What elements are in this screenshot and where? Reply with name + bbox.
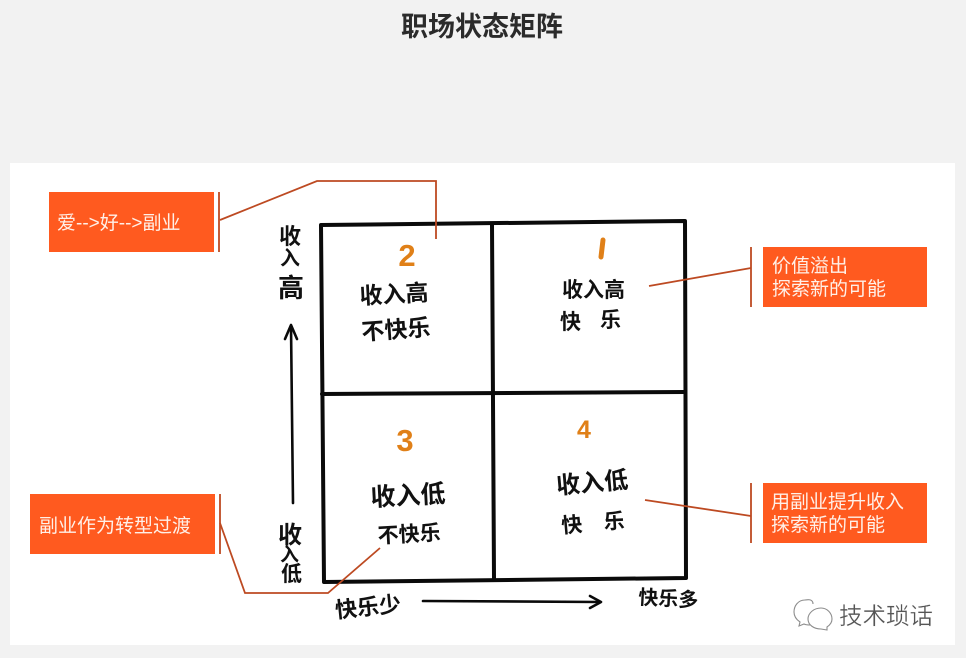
callout: side job raises income: 用副业提升收入 bbox=[771, 491, 904, 513]
watermark: account name: 技术琐话 bbox=[839, 603, 933, 629]
x axis arrow bbox=[423, 596, 601, 608]
quadrant 4: 4 bbox=[577, 416, 591, 444]
callout: value overflow bbox=[649, 247, 927, 307]
quadrant 1: 快 bbox=[560, 311, 581, 334]
quadrant 2: 不快乐 bbox=[361, 314, 431, 345]
quadrant 1: 乐 bbox=[600, 309, 621, 332]
title: 职场状态矩阵 bbox=[401, 12, 563, 42]
callout: side job raises income: 探索新的可能 bbox=[771, 514, 885, 536]
callout: love to side job bbox=[49, 181, 436, 252]
y axis: income low label: 入 bbox=[280, 544, 299, 566]
quadrant 3: 收入低 bbox=[370, 480, 446, 512]
quadrant 2 bbox=[359, 238, 431, 345]
quadrant 4: 乐 bbox=[603, 510, 625, 534]
quadrant 3: 不快乐 bbox=[377, 522, 441, 548]
callout: side job as transition: 副业作为转型过渡 bbox=[39, 515, 191, 537]
quadrant 1 bbox=[560, 240, 625, 334]
y axis: income high label: 入 bbox=[280, 247, 300, 270]
quadrant 4: 收入低 bbox=[555, 467, 629, 500]
x axis: much happiness label: 快乐多 bbox=[638, 586, 699, 612]
callout: side job raises income bbox=[645, 483, 927, 543]
quadrant 4: 快 bbox=[560, 513, 583, 538]
y axis: income high label bbox=[278, 224, 304, 303]
watermark: WeChat icon bbox=[794, 600, 832, 630]
y axis: income high label: 高 bbox=[278, 273, 304, 303]
y axis: income low label bbox=[278, 522, 302, 586]
quadrant 4 bbox=[555, 416, 629, 538]
y axis: income low label: 低 bbox=[281, 563, 302, 586]
callout: love to side job: 爱-->好-->副业 bbox=[57, 212, 181, 234]
quadrant 3 bbox=[370, 423, 446, 548]
panel: white canvas bbox=[10, 163, 955, 645]
quadrant 3: 3 bbox=[396, 423, 414, 458]
y axis arrow bbox=[285, 325, 297, 503]
quadrant 2: 收入高 bbox=[359, 279, 429, 309]
quadrant 2: 2 bbox=[398, 238, 416, 273]
callout: value overflow: 价值溢出 bbox=[772, 255, 848, 277]
y axis: income low label: 收 bbox=[278, 522, 302, 549]
quadrant 1: 收入高 bbox=[562, 278, 625, 302]
callout: value overflow: 探索新的可能 bbox=[772, 278, 886, 300]
x axis: little happiness label: 快乐少 bbox=[334, 591, 402, 623]
y axis: income high label: 收 bbox=[279, 224, 301, 249]
matrix grid bbox=[321, 221, 686, 582]
callout: side job as transition bbox=[30, 494, 380, 593]
